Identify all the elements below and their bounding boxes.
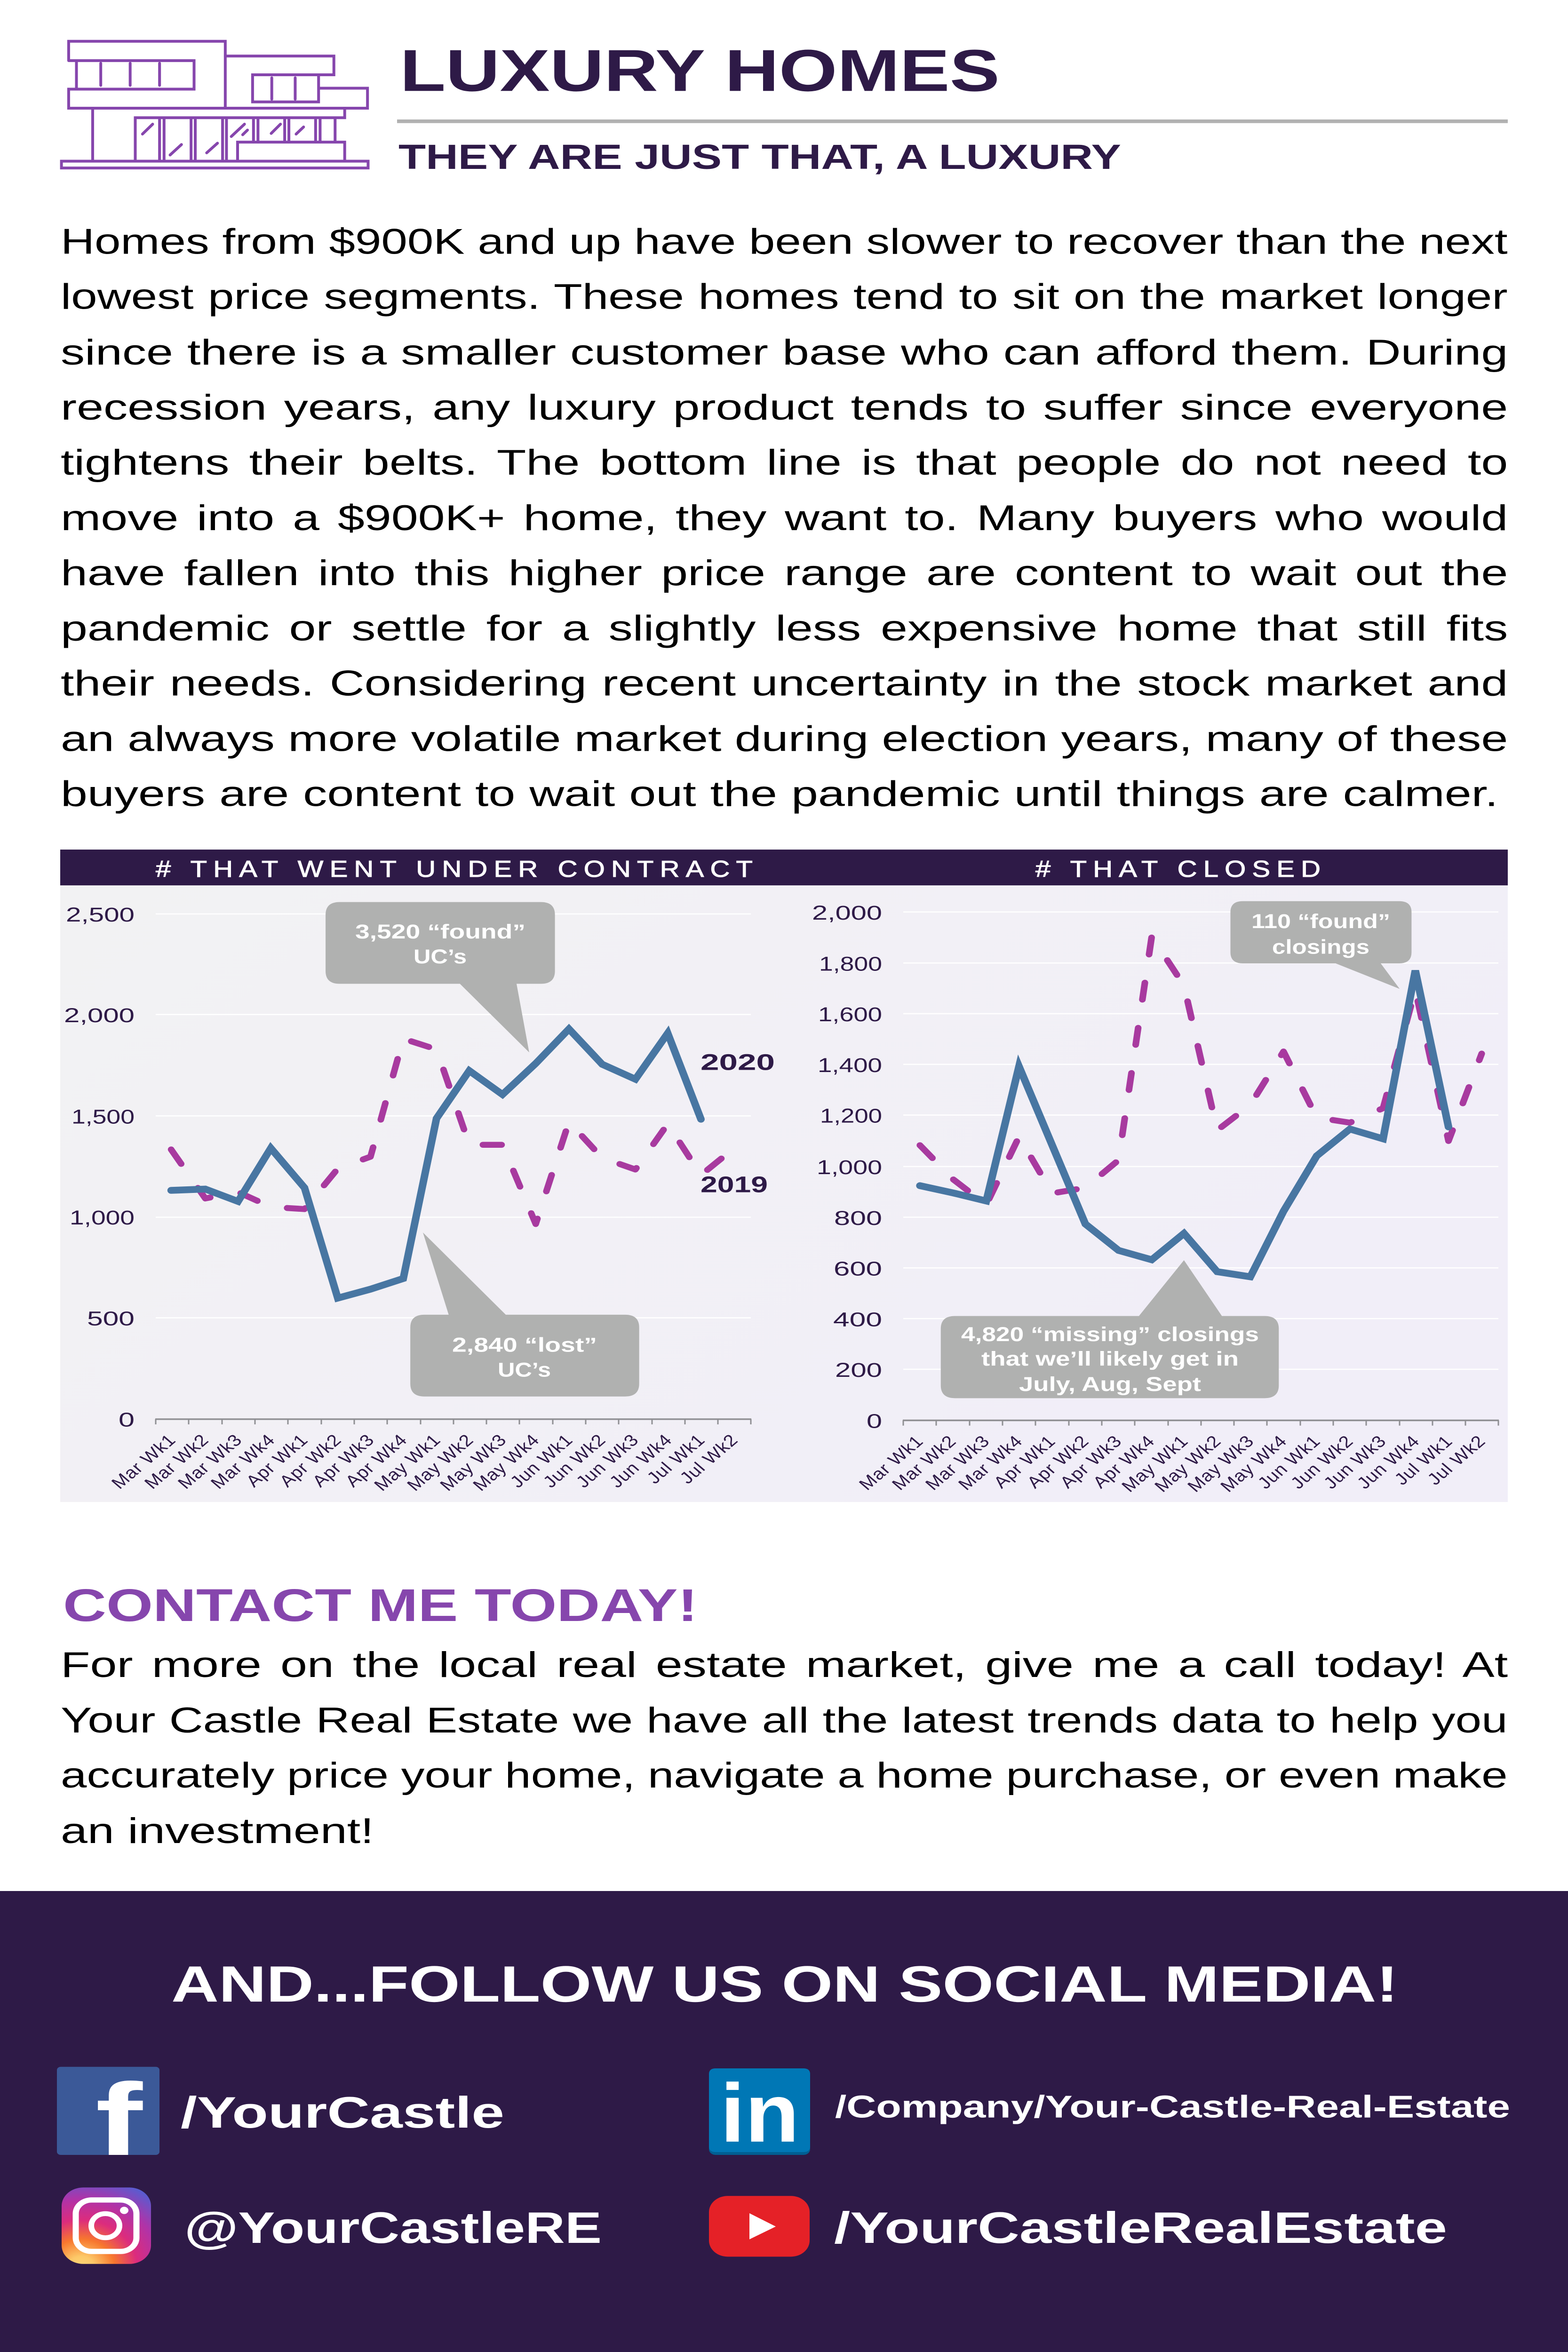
y axis labels: closed: 2,000 [812, 901, 882, 924]
text block: luxury homes paragraph: buyers are content to wait out the pandemic until things are calmer. [61, 773, 1498, 814]
text block: luxury homes paragraph: move into a $900K+ home, they want to. Many buyers who would [61, 498, 1508, 538]
x axis labels: under contract [107, 1430, 742, 1494]
text block: luxury homes paragraph: lowest price segments. These homes tend to sit on the market longer [61, 276, 1508, 317]
callout: lost UCs [410, 1232, 639, 1397]
x axis labels: under contract: Jul Wk2 [676, 1430, 742, 1487]
text block: luxury homes paragraph: pandemic or settle for a slightly less expensive home that still fits [61, 608, 1508, 648]
text block: contact paragraph: accurately price your home, navigate a home purchase, or even make [61, 1755, 1508, 1795]
callout: found closings: closings [1272, 936, 1369, 958]
subtitle: THEY ARE JUST THAT, A LUXURY [398, 138, 1121, 177]
x axis labels: closed: Apr Wk1 [989, 1432, 1060, 1492]
panel: social footer [0, 1891, 1568, 2352]
callout: missing closings: 4,820 “missing” closings [961, 1323, 1259, 1345]
y axis labels: under contract [64, 904, 135, 1431]
x axis labels: closed: May Wk2 [1150, 1432, 1226, 1496]
y axis labels: under contract: 1,000 [70, 1206, 135, 1229]
x axis labels: closed: Apr Wk2 [1023, 1432, 1093, 1492]
series label: 2019: 2019 [700, 1172, 768, 1198]
y axis labels: closed: 1,800 [819, 953, 882, 975]
callout: lost UCs: 2,840 “lost” [452, 1334, 597, 1356]
y axis labels: closed: 1,000 [817, 1156, 882, 1178]
panel: charts background [60, 885, 1508, 1502]
icon: linkedin: in [720, 2066, 799, 2159]
x axis labels: closed: Mar Wk4 [954, 1432, 1027, 1494]
title: LUXURY HOMES [400, 37, 1000, 103]
callout: lost UCs: UC’s [498, 1359, 551, 1381]
heading: under contract: # THAT WENT UNDER CONTRACT [156, 856, 753, 882]
data line: 2019 closings dashed [920, 937, 1482, 1205]
y axis labels: under contract: 2,500 [66, 904, 135, 926]
text block: contact paragraph: Your Castle Real Estate we have all the latest trends data to help you [61, 1700, 1508, 1740]
y axis labels: closed [812, 901, 882, 1432]
x axis labels: closed: Jul Wk2 [1423, 1432, 1490, 1489]
y axis labels: closed: 1,400 [818, 1054, 882, 1076]
x axis labels: under contract: May Wk2 [403, 1430, 478, 1494]
icon: modern luxury house [62, 41, 368, 168]
callout: found UCs [326, 902, 555, 1052]
y axis labels: under contract: 2,000 [64, 1004, 135, 1026]
x axis labels: under contract: Mar Wk1 [107, 1430, 180, 1493]
callout: found UCs: 3,520 “found” [355, 920, 525, 943]
x axis labels: closed: Mar Wk2 [888, 1432, 961, 1494]
x axis labels: under contract: Apr Wk1 [242, 1430, 312, 1491]
chart: closed line chart [812, 901, 1499, 1496]
text block: luxury homes paragraph: since there is a smaller customer base who can afford them. During [61, 332, 1508, 372]
y axis labels: under contract: 500 [87, 1307, 135, 1330]
x axis labels: under contract: May Wk3 [436, 1430, 511, 1494]
callout: found UCs: UC’s [414, 945, 467, 968]
text: facebook handle: /YourCastle [181, 2087, 504, 2137]
x axis labels: closed: Apr Wk3 [1056, 1432, 1126, 1492]
x axis labels: under contract: Jun Wk3 [572, 1430, 643, 1491]
callout: missing closings: July, Aug, Sept [1019, 1373, 1201, 1395]
y axis labels: closed: 400 [833, 1308, 882, 1331]
callout: found closings [1230, 901, 1411, 989]
x axis labels: closed: Jul Wk1 [1390, 1432, 1457, 1489]
x axis labels: under contract: May Wk4 [469, 1430, 544, 1494]
x axis labels: closed: May Wk3 [1183, 1432, 1258, 1496]
callout: found closings: 110 “found” [1251, 910, 1390, 932]
x axis labels: under contract: Mar Wk4 [207, 1430, 279, 1493]
y axis labels: closed: 800 [834, 1207, 882, 1229]
x axis labels: under contract: May Wk1 [370, 1430, 445, 1494]
text block: luxury homes paragraph: recession years, any luxury product tends to suffer since everyone [61, 387, 1508, 427]
x axis labels: under contract: Apr Wk2 [275, 1430, 346, 1491]
x axis labels: closed: Jun Wk3 [1319, 1432, 1391, 1493]
x axis labels: under contract: Jun Wk2 [539, 1430, 610, 1491]
header rule [397, 119, 1508, 123]
text block: contact paragraph: For more on the local real estate market, give me a call today! At [61, 1645, 1508, 1685]
x axis labels: closed: Jun Wk1 [1253, 1432, 1325, 1493]
x axis labels: closed: Jun Wk4 [1353, 1432, 1424, 1493]
y axis labels: closed: 1,600 [818, 1003, 882, 1025]
data line: 2020 closings solid [920, 970, 1449, 1277]
callout: missing closings [941, 1260, 1279, 1398]
y axis labels: under contract: 1,500 [72, 1105, 135, 1128]
y axis labels: closed: 1,200 [820, 1104, 882, 1127]
x axis labels: under contract: Apr Wk4 [341, 1430, 412, 1491]
icon: youtube [709, 2196, 810, 2257]
x axis labels: under contract: Jun Wk1 [506, 1430, 577, 1491]
text block: luxury homes paragraph [0, 0, 1568, 845]
text: instagram handle: @YourCastleRE [184, 2203, 602, 2252]
y axis labels: closed: 600 [834, 1257, 882, 1280]
x axis labels: closed [855, 1432, 1490, 1496]
text block: luxury homes paragraph: Homes from $900K and up have been slower to recover than the next [61, 221, 1508, 262]
x axis labels: closed: Mar Wk1 [855, 1432, 928, 1494]
series label: 2020: 2020 [700, 1050, 775, 1075]
x axis labels: under contract: Apr Wk3 [308, 1430, 379, 1491]
panel: chart header bar [60, 850, 1508, 885]
text block: luxury homes paragraph: tightens their belts. The bottom line is that people do not need to [61, 442, 1508, 482]
text: youtube handle: /YourCastleRealEstate [834, 2203, 1447, 2252]
x axis labels: closed: Apr Wk4 [1089, 1432, 1159, 1492]
icon: facebook: f [96, 2062, 143, 2177]
text block: contact paragraph [0, 1609, 1568, 1891]
icon: facebook [57, 2062, 159, 2177]
heading: closed: # THAT CLOSED [1035, 856, 1321, 882]
callout: missing closings: that we’ll likely get in [981, 1348, 1239, 1370]
text block: contact paragraph: an investment! [61, 1811, 374, 1851]
text block: luxury homes paragraph: their needs. Considering recent uncertainty in the stock market and [61, 663, 1508, 703]
x axis labels: under contract: Jul Wk1 [643, 1430, 709, 1487]
heading: follow us: AND...FOLLOW US ON SOCIAL MEDIA! [171, 1956, 1398, 2013]
x axis labels: under contract: Mar Wk3 [174, 1430, 247, 1493]
y axis labels: closed: 0 [867, 1410, 882, 1432]
y axis labels: closed: 200 [835, 1359, 882, 1381]
icon: instagram [62, 2187, 151, 2264]
x axis labels: closed: Mar Wk3 [921, 1432, 994, 1494]
chart: under contract line chart [64, 902, 775, 1494]
text: linkedin handle: /Company/Your-Castle-Real-Estate [835, 2090, 1510, 2124]
x axis labels: closed: May Wk1 [1117, 1432, 1193, 1496]
heading: contact me today: CONTACT ME TODAY! [63, 1580, 698, 1631]
x axis labels: closed: Jun Wk2 [1286, 1432, 1358, 1493]
x axis labels: under contract: Mar Wk2 [140, 1430, 213, 1493]
data line: 2019 dashed [171, 1039, 734, 1224]
y axis labels: under contract: 0 [119, 1408, 135, 1431]
data line: 2020 solid [171, 1029, 701, 1298]
x axis labels: under contract: Jun Wk4 [605, 1430, 677, 1491]
text block: luxury homes paragraph: have fallen into this higher price range are content to wait out the [61, 553, 1508, 593]
text block: luxury homes paragraph: an always more volatile market during election years, many of these [61, 718, 1508, 759]
x axis labels: closed: May Wk4 [1216, 1432, 1291, 1496]
